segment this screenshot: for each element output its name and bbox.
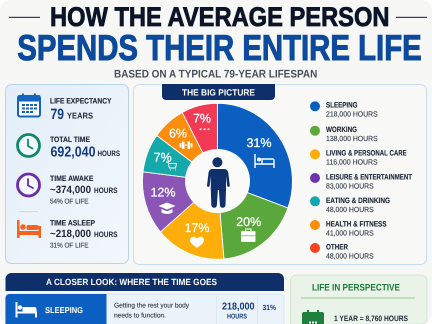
- stat: life expectancy: [50, 96, 112, 123]
- stat: time asleep: ~218,000: [50, 228, 91, 240]
- slice label: 6% health: 6%: [169, 126, 187, 140]
- row: sleeping: [6, 294, 284, 324]
- row: sleeping: HOURS: [227, 313, 247, 320]
- stat: life expectancy: 79: [50, 106, 64, 123]
- icon: calendar: [18, 94, 40, 116]
- slice label: 6% health: [169, 126, 192, 149]
- heading tab: THE BIG PICTURE: [182, 88, 255, 98]
- legend item: other: 48,000 HOURS: [326, 252, 374, 261]
- slice label: 17% living: 17%: [184, 221, 210, 235]
- legend item: working: 138,000 HOURS: [326, 134, 378, 143]
- legend: [310, 101, 412, 261]
- legend item: living: [310, 149, 407, 167]
- slice label: 12% leisure: [150, 186, 176, 214]
- slice label: 31% sleeping: [246, 136, 274, 168]
- panel: the big picture: [134, 84, 426, 264]
- title: [9, 2, 427, 68]
- legend item: sleeping: 218,000 HOURS: [326, 110, 378, 119]
- stat: life expectancy: LIFE EXPECTANCY: [50, 96, 112, 106]
- icon: green calendar: [302, 310, 324, 324]
- legend item: other: OTHER: [326, 243, 348, 252]
- slice label: 17% living: [184, 221, 210, 248]
- stat: total time: HOURS: [98, 149, 120, 158]
- stat: time awake: 54% OF LIFE: [50, 198, 89, 205]
- legend item: leisure: [310, 172, 412, 190]
- stat: time asleep: HOURS: [94, 230, 118, 239]
- slice label: 20% working: [236, 215, 261, 242]
- legend item: health: HEALTH & FITNESS: [326, 220, 386, 228]
- legend item: living: LIVING & PERSONAL CARE: [326, 149, 407, 158]
- legend item: eating: [310, 196, 390, 214]
- stat: time awake: HOURS: [94, 186, 118, 195]
- heading: LIFE IN PERSPECTIVE: [312, 283, 400, 294]
- heading bar: A CLOSER LOOK: WHERE THE TIME GOES: [46, 277, 217, 287]
- slice label: 20% working: 20%: [236, 215, 261, 229]
- icon: person: [207, 157, 230, 208]
- stat: total time: 692,040: [50, 145, 96, 161]
- panel: a closer look: [6, 273, 284, 324]
- row: sleeping: SLEEPING: [45, 305, 83, 315]
- icon: green clock: [18, 134, 40, 156]
- fact: one year: 1 YEAR = 8,760 HOURS: [334, 314, 408, 323]
- icon: bed: [16, 302, 36, 318]
- stat: total time: TOTAL TIME: [50, 135, 90, 144]
- pie chart: [142, 103, 292, 259]
- row: sleeping: needs to function.: [114, 312, 166, 319]
- legend item: sleeping: SLEEPING: [326, 101, 358, 110]
- stat: time awake: ~374,000: [50, 184, 91, 196]
- slice label: 31% sleeping: 31%: [246, 136, 272, 150]
- heading bar: [6, 273, 284, 291]
- stat: time asleep: TIME ASLEEP: [50, 218, 95, 227]
- legend item: eating: EATING & DRINKING: [326, 196, 390, 205]
- legend item: working: [310, 125, 378, 143]
- slice label: 7% eating: [154, 150, 176, 170]
- icon: purple clock: [18, 174, 40, 196]
- stat: time asleep: [50, 218, 118, 249]
- stat: life expectancy: YEARS: [67, 110, 93, 120]
- slice label: 7% eating: 7%: [154, 150, 172, 164]
- panel: key stats: [6, 84, 128, 264]
- legend item: leisure: 83,000 HOURS: [326, 182, 374, 190]
- legend item: sleeping: [310, 101, 378, 119]
- legend item: health: 41,000 HOURS: [326, 228, 374, 238]
- title: HOW THE AVERAGE PERSON: [50, 2, 390, 32]
- legend item: eating: 48,000 HOURS: [326, 205, 374, 214]
- legend item: other: [310, 243, 374, 261]
- icon: orange bed: [17, 211, 41, 238]
- row: sleeping: Getting the rest your body: [114, 303, 190, 310]
- stat: time awake: [50, 174, 118, 205]
- slice label: 12% leisure: 12%: [150, 186, 176, 200]
- legend item: living: 116,000 HOURS: [326, 158, 378, 167]
- stat: total time: [50, 135, 120, 161]
- subtitle: BASED ON A TYPICAL 79-YEAR LIFESPAN: [114, 68, 317, 80]
- heading tab: [162, 84, 275, 100]
- panel: life in perspective: [290, 275, 427, 324]
- row: sleeping: 218,000: [222, 301, 255, 312]
- stat: time asleep: 31% OF LIFE: [50, 242, 89, 249]
- row: sleeping: 31%: [262, 303, 276, 312]
- stat: time awake: TIME AWAKE: [50, 174, 94, 183]
- legend item: working: WORKING: [326, 125, 357, 134]
- slice label: 7% other: 7%: [193, 112, 211, 126]
- legend item: health: [310, 220, 386, 238]
